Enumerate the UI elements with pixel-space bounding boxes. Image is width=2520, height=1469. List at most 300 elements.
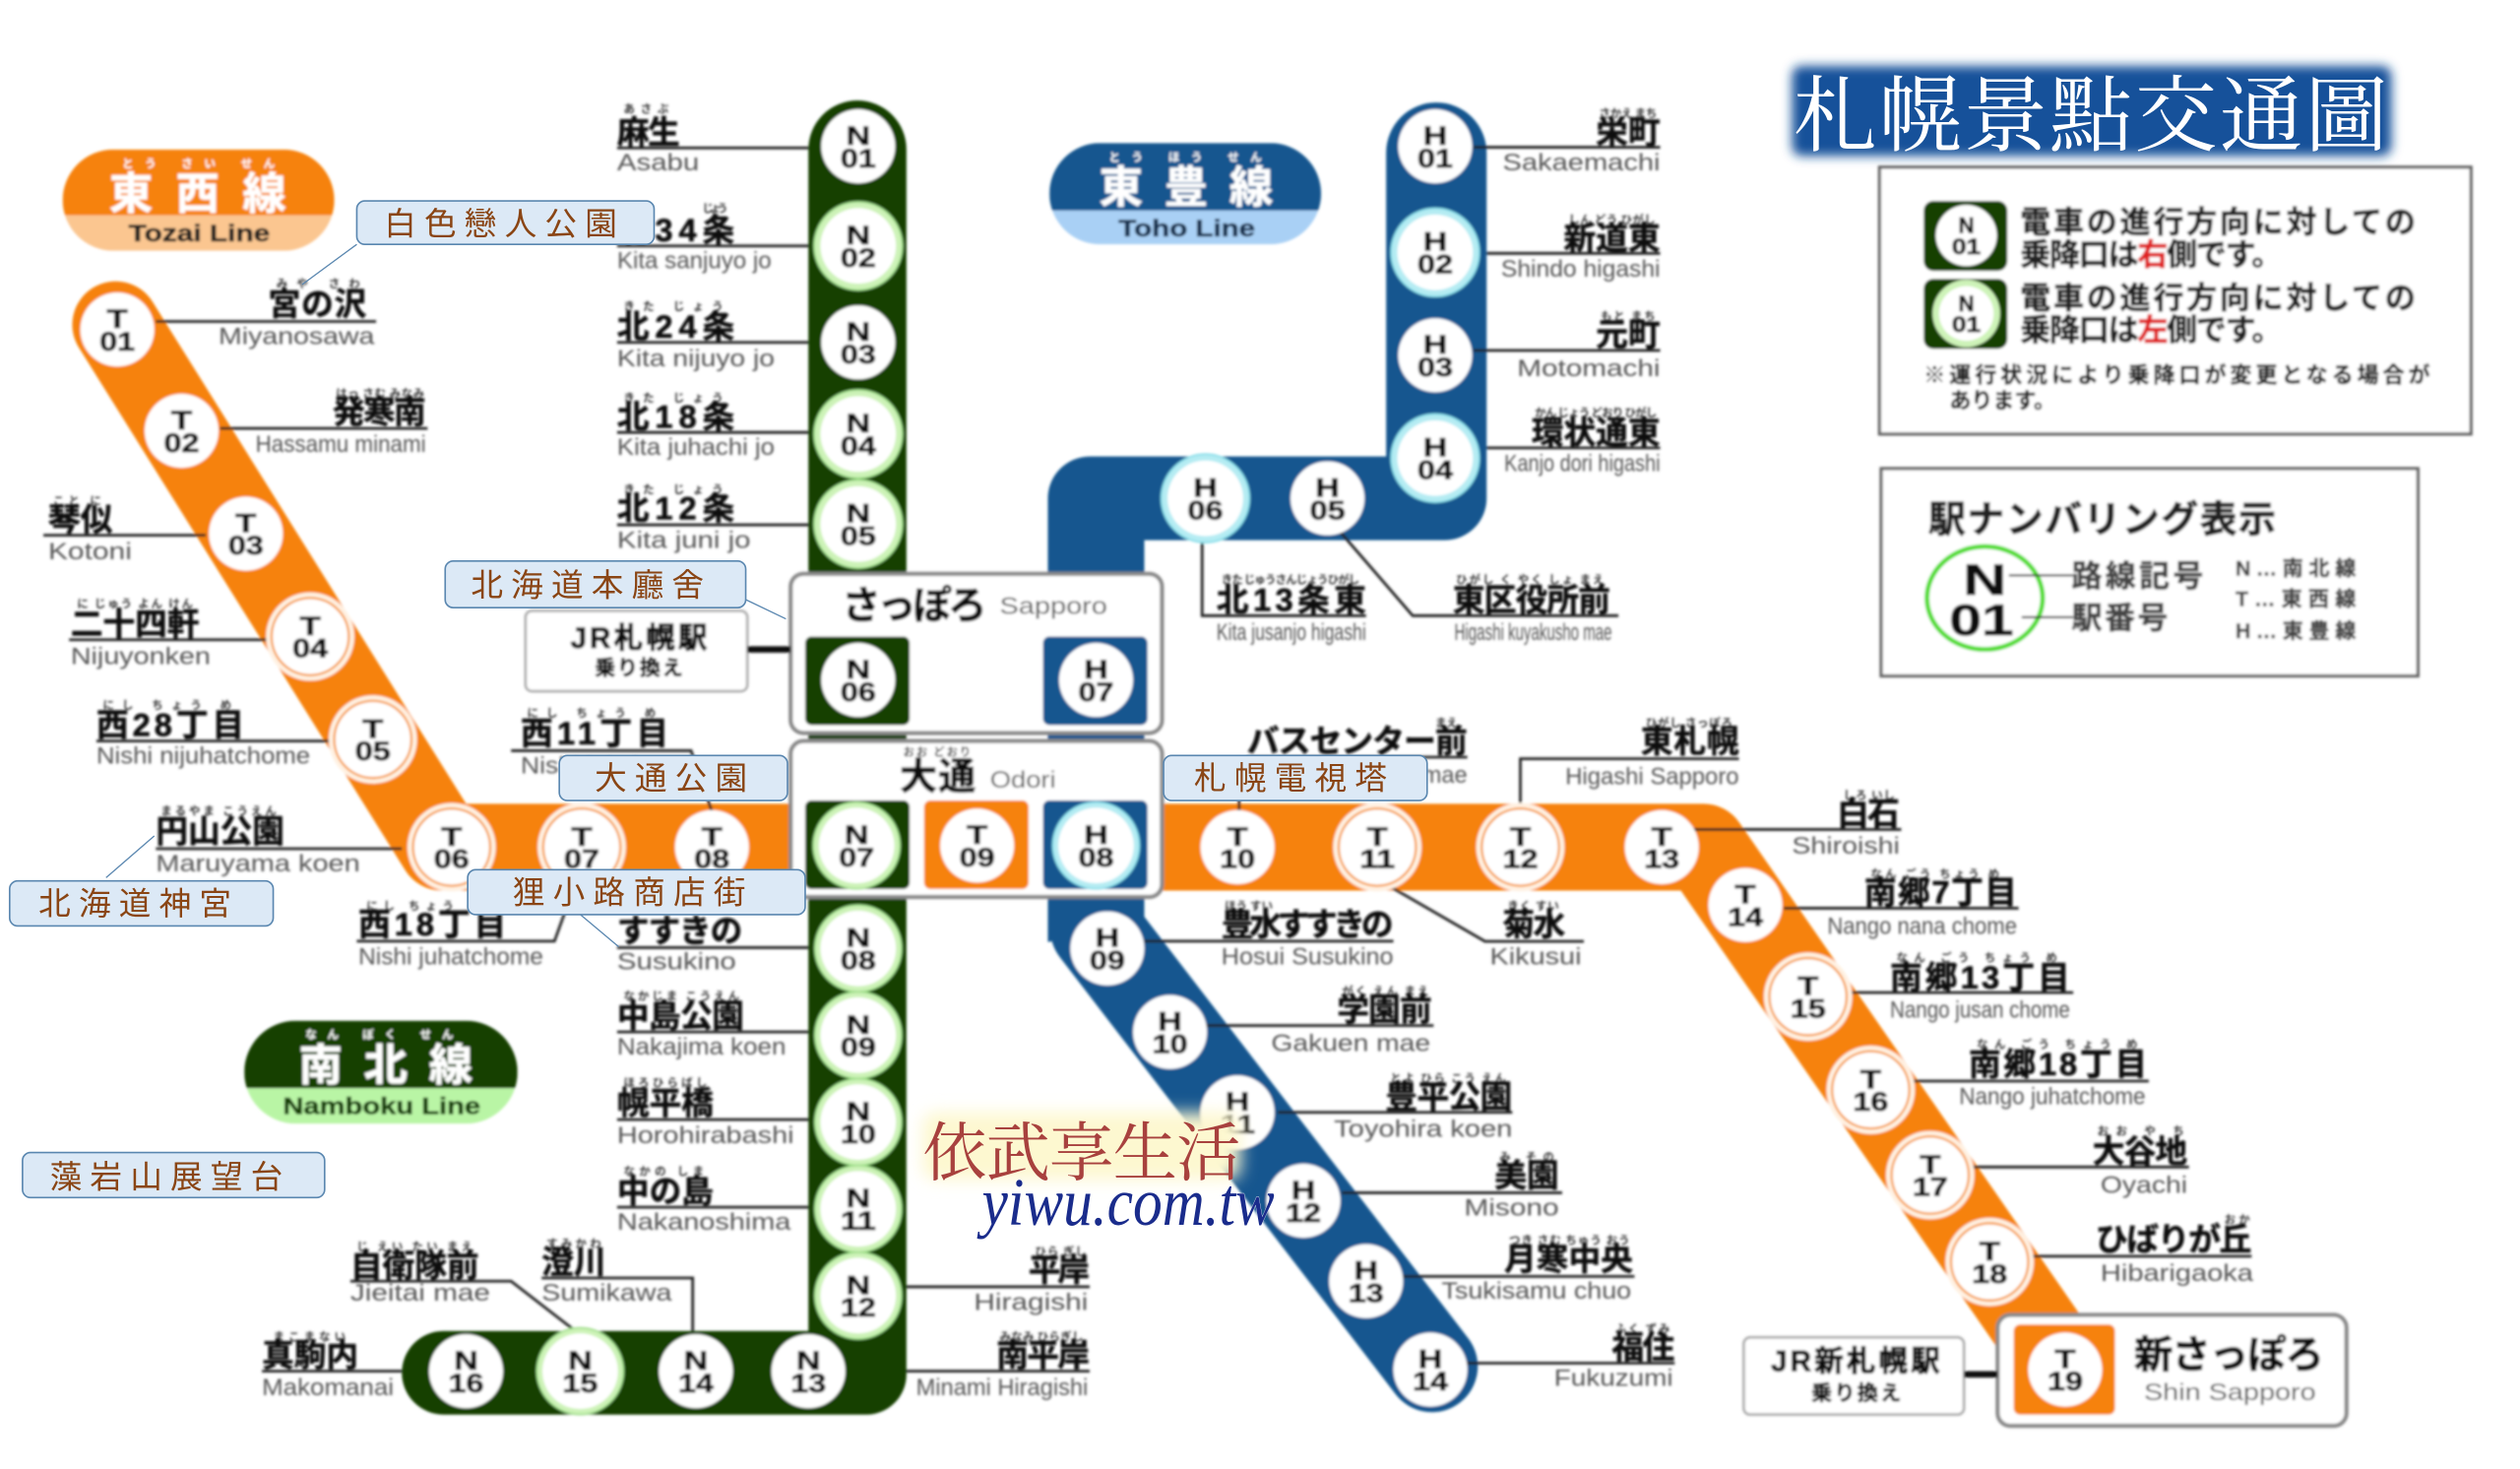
station T03: 03 (228, 531, 264, 560)
station N05: N (847, 499, 870, 529)
label: Hassamu minami: Hassamu minami (256, 431, 426, 458)
station N05: 05 (841, 521, 876, 550)
label: Makomanai: 真駒内 (262, 1337, 358, 1373)
station T08 (675, 810, 749, 884)
station N08: 08 (841, 945, 876, 975)
station N02: 02 (841, 243, 876, 273)
callout: Mt Moiwa Observatory: 藻岩山展望台 (50, 1152, 290, 1198)
label: Misono: み その (1499, 1149, 1554, 1165)
station T12 (1477, 803, 1564, 891)
label: Nakajima koen: Nakajima koen (617, 1034, 786, 1060)
station T16: 16 (1853, 1087, 1888, 1117)
station H03: H (1423, 330, 1447, 359)
label: Kotoni: Kotoni (48, 539, 132, 565)
station T18: T (1980, 1237, 2001, 1266)
station N12: N (847, 1270, 870, 1300)
pill: Tozai Line (63, 150, 335, 251)
station T02 (145, 394, 219, 468)
label: Nango 7: Nango nana chome (1827, 914, 2017, 940)
label: Kita 12: Kita juni jo (617, 528, 750, 554)
station N06: N (847, 655, 870, 684)
callout: Hokkaido Shrine: 北海道神宮 (38, 878, 239, 925)
pill: Namboku Line: 南北線 (299, 1042, 472, 1090)
station N08: N (847, 924, 870, 953)
station N16: N (454, 1346, 478, 1375)
legend: station numbering: 路線記号 (2071, 559, 2203, 594)
legend: boarding side: ※運行状況により乗降口が変更となる場合が (1923, 363, 2430, 388)
label: Kita 18: きた じょう (623, 390, 724, 406)
station H06: 06 (1188, 495, 1223, 525)
label: Bus center mae (1239, 715, 1468, 811)
label: Oyachi: 大谷地 (2093, 1132, 2187, 1169)
label: Nijuyonken (69, 596, 270, 670)
station T10: T (1228, 822, 1248, 852)
station H07: H (1084, 655, 1108, 684)
station T09: 09 (960, 843, 995, 872)
pill: Namboku Line: Namboku Line (283, 1093, 480, 1119)
station N07: N (845, 820, 868, 850)
label: Miyanosawa: みや さわ (277, 276, 360, 291)
station H04: 04 (1418, 456, 1453, 485)
label: Maruyama koen (156, 803, 402, 877)
callout: Shiroi Koibito Park: 白色戀人公園 (384, 198, 625, 244)
label: Nishi 11: 西11丁目 (521, 715, 668, 751)
label: Sakaemachi: 栄町 (1596, 113, 1661, 150)
label: Hassamu minami: 発寒南 (333, 393, 426, 429)
station N09 (815, 991, 902, 1079)
station T08: T (702, 822, 724, 852)
station N10: 10 (841, 1119, 876, 1149)
legend: boarding side: あります。 (1949, 389, 2055, 414)
station N02: N (847, 221, 870, 250)
label: Hiragishi: Hiragishi (974, 1290, 1088, 1316)
label: Nishi 28: にし ちょう め (102, 697, 231, 713)
label: Makomanai: まこまない (274, 1329, 346, 1345)
station T03: T (235, 508, 257, 538)
pill: Toho Line: 東豊線 (1100, 164, 1273, 213)
station T15: 15 (1791, 993, 1826, 1023)
label: Fukuzumi: Fukuzumi (1554, 1365, 1673, 1391)
label: Shiroishi: しろ いし (1844, 787, 1895, 802)
station H08 (1052, 802, 1140, 889)
station H01 (1398, 109, 1473, 183)
pill: Toho Line (1049, 143, 1321, 244)
station T19: 19 (2048, 1367, 2083, 1396)
station T18: 18 (1972, 1259, 2007, 1289)
label: Nakanoshima: なかの しま (623, 1163, 704, 1179)
label: Shiroishi: 白石 (1837, 796, 1900, 832)
pill: Namboku Line: なん ぼく せん (305, 1027, 453, 1043)
station N01: 01 (841, 144, 876, 173)
station H13: H (1354, 1256, 1378, 1286)
label: Higashi Sapporo: ひがし さっぽろ (1646, 715, 1732, 731)
callout: Odori Park: 大通公園 (595, 753, 755, 799)
label: Oyachi (1967, 1123, 2189, 1198)
label: Tsukisamu chuo: 月寒中央 (1504, 1241, 1633, 1277)
station H06: H (1193, 473, 1218, 502)
label: Nango 13: Nango jusan chome (1890, 996, 2070, 1023)
label: Nakajima koen (617, 989, 808, 1060)
station T17: 17 (1913, 1173, 1948, 1202)
label: Kita 12 (617, 481, 808, 554)
station N14: N (684, 1346, 708, 1375)
label: Bus center mae: Bus mae (1376, 762, 1468, 789)
label: Miyanosawa: Miyanosawa (219, 323, 375, 350)
station T09 (940, 808, 1014, 882)
station N11: N (847, 1183, 870, 1213)
label: Fukuzumi: 福住 (1612, 1329, 1674, 1366)
label: Kita 18: 北18条 (617, 398, 734, 434)
label: Hassamu minami: はっ さむ みなみ (336, 385, 424, 401)
label: Higashi kuyakusho mae: 東区役所前 (1453, 581, 1610, 617)
station H06 (1162, 454, 1249, 543)
label: Nishi 18: 西18丁目 (358, 906, 506, 942)
label: Kita 13 higashi: 北13条東 (1217, 581, 1366, 617)
label: Kita 34: Kita sanjuyo jo (617, 248, 772, 275)
watermark: yiwu.com.tw (976, 1165, 1275, 1240)
station N12 (815, 1252, 902, 1339)
box: Shin Sapporo station (1997, 1315, 2347, 1426)
label: Nango 7 (1784, 865, 2019, 940)
station N13 (772, 1334, 846, 1408)
label: Motomachi: もと まち (1601, 308, 1656, 324)
station H09: 09 (1090, 945, 1125, 975)
station H10: H (1158, 1007, 1182, 1037)
label: Susukino (617, 913, 808, 975)
label: Hibarigaoka: Hibarigaoka (2101, 1260, 2253, 1287)
station H10: 10 (1153, 1029, 1188, 1058)
label: Motomachi: Motomachi (1517, 355, 1661, 382)
label: Oyachi: おお や ち (2098, 1123, 2184, 1139)
station N08 (815, 905, 902, 991)
station T12: 12 (1503, 845, 1538, 874)
label: Nakanoshima: Nakanoshima (617, 1209, 791, 1236)
label: Tsukisamu chuo: つき さむ ちゅう おう (1509, 1233, 1630, 1248)
icon: N01 left side: 01 (1952, 312, 1981, 337)
station N03: 03 (841, 340, 876, 369)
station T06: 06 (434, 845, 470, 874)
station N15 (536, 1328, 623, 1415)
box: Sapporo station: さっぽろ (843, 586, 986, 628)
station H11: 11 (1220, 1110, 1255, 1139)
label: Kita 34: 北34条 (617, 212, 734, 248)
watermark: 依武享生活 (922, 1118, 1240, 1189)
station H04 (1391, 414, 1480, 502)
station N12: 12 (841, 1293, 876, 1322)
station N03 (821, 305, 895, 379)
label: Asabu: 麻生 (617, 113, 680, 150)
station H04: H (1423, 433, 1447, 463)
box: JR Sapporo transfer: JR札幌駅 (571, 622, 707, 655)
station T07 (537, 803, 626, 891)
station N07 (813, 802, 900, 889)
station H09 (1070, 912, 1144, 986)
station H10 (1133, 995, 1207, 1069)
label: Sumikawa: すみかわ (546, 1236, 601, 1251)
label: Nishi 28 (96, 697, 330, 770)
label: Nishi 18 (356, 892, 572, 971)
legend: station numbering: 01 (1949, 597, 2014, 645)
station H09: H (1096, 924, 1119, 953)
station N11: 11 (841, 1206, 876, 1236)
label: Nakajima koen: 中島公園 (617, 997, 744, 1034)
station N11 (815, 1166, 902, 1252)
station N14: 14 (678, 1369, 714, 1398)
label: Minami Hiragishi: みなみ ひらぎし (1000, 1329, 1083, 1345)
icon: N01 left side (1923, 279, 2007, 349)
label: Fukuzumi (1466, 1320, 1674, 1391)
station T06: T (441, 822, 463, 852)
label: Minami Hiragishi (907, 1329, 1090, 1401)
label: Minami Hiragishi: Minami Hiragishi (916, 1374, 1088, 1401)
label: Gakuen mae: がく えん まえ (1342, 984, 1428, 999)
label: Hosui Susukino: ほう すい (1225, 898, 1273, 914)
label: Kikusui: きく すい (1507, 898, 1559, 914)
box: Odori station: 大通 (900, 756, 976, 798)
label: Maruyama koen: まるやま こうえん (160, 803, 277, 819)
label: Hiragishi: 平岸 (1029, 1251, 1090, 1288)
station T01 (81, 292, 155, 366)
station H08: H (1084, 820, 1108, 850)
label: Kita 34 (617, 201, 808, 275)
station H05: H (1315, 473, 1340, 502)
station T04: T (299, 611, 321, 641)
label: Higashi Sapporo: 東札幌 (1641, 723, 1739, 759)
legend: station numbering: N…南北線 (2236, 556, 2356, 580)
station N16 (429, 1334, 503, 1408)
label: Hibarigaoka: おか (2225, 1211, 2250, 1227)
label: Kita 24 (617, 298, 808, 372)
pill: Namboku Line (244, 1021, 518, 1123)
label: Jieitai mae: 自衛隊前 (350, 1246, 479, 1283)
station T01: 01 (99, 327, 135, 356)
station T04 (266, 593, 354, 680)
station T16 (1827, 1046, 1915, 1134)
pill: Tozai Line: 東西線 (109, 170, 286, 219)
station N15: 15 (562, 1369, 598, 1398)
label: Toyohira koen: 豊平公園 (1385, 1078, 1512, 1115)
label: Kotoni: こと に (53, 493, 101, 509)
label: Hosui Susukino (1144, 898, 1394, 971)
label: Nishi 11 (511, 705, 712, 811)
station H12: H (1292, 1176, 1315, 1205)
label: Shiroishi (1687, 787, 1901, 860)
box: Odori station: おお どおり (904, 743, 971, 759)
station N04 (814, 390, 903, 479)
station N13: 13 (790, 1369, 826, 1398)
callout: Hokkaido Government Office: 北海道本廳舍 (471, 560, 712, 607)
label: Higashi Sapporo: Higashi Sapporo (1565, 764, 1739, 791)
station T12: T (1510, 822, 1532, 852)
label: Kikusui (1389, 886, 1584, 971)
station T13 (1625, 810, 1699, 884)
station N07: 07 (839, 843, 874, 872)
station H14 (1394, 1332, 1468, 1407)
label: Hosui Susukino: 豊水すすきの (1222, 906, 1394, 942)
label: Toyohira koen (1278, 1070, 1512, 1142)
station T16: T (1860, 1064, 1882, 1094)
line: Toho (blue) (1047, 102, 1486, 1367)
label: Nango 7: 南郷7丁目 (1864, 874, 2017, 911)
station T11: 11 (1359, 845, 1395, 874)
label: Hibarigaoka (2028, 1211, 2253, 1287)
legend: station numbering: 駅ナンバリング表示 (1928, 498, 2276, 540)
label: Sumikawa (541, 1236, 693, 1331)
label: Toyohira koen: Toyohira koen (1334, 1116, 1512, 1142)
station N04: N (847, 409, 870, 438)
station T14: 14 (1728, 902, 1763, 931)
callout: Hokkaido Shrine (10, 836, 274, 926)
label: Toyohira koen: とよ ひら こう えん (1390, 1070, 1506, 1086)
label: Kita 24: きた じょう (623, 298, 724, 314)
label: Shindo higashi: 新道東 (1564, 220, 1661, 256)
station T03 (209, 496, 283, 571)
label: Gakuen mae (1205, 984, 1433, 1057)
label: Miyanosawa: 宮の沢 (269, 286, 367, 322)
label: Nishi 18: にし ちょう め (366, 898, 479, 914)
callout: Tanukikoji Shopping Street: 狸小路商店街 (513, 867, 754, 914)
callout: Odori Park (559, 753, 788, 800)
label: Kikusui: 菊水 (1503, 906, 1565, 942)
label: Jieitai mae: じ えい たい まえ (356, 1239, 472, 1254)
station N01 (821, 109, 895, 183)
label: Maruyama koen: Maruyama koen (156, 851, 360, 877)
station T15 (1764, 952, 1853, 1041)
legend: station numbering: T…東西線 (2236, 588, 2356, 611)
icon: N01 right side (1923, 201, 2007, 271)
station N09: 09 (841, 1033, 876, 1062)
label: Maruyama koen: 円山公園 (156, 813, 284, 850)
station T02: 02 (164, 428, 199, 458)
legend: station numbering: H…東豊線 (2236, 619, 2356, 643)
label: Higashi Sapporo (1520, 715, 1739, 811)
legend: boarding side: 電車の進行方向に対しての (2020, 281, 2416, 315)
box: Odori station: Odori (990, 767, 1056, 794)
pill: Toho Line: とう ほう せん (1109, 149, 1262, 164)
station T13: T (1652, 822, 1672, 852)
station H11 (1201, 1075, 1275, 1149)
label: Kanjo dori higashi (1486, 405, 1661, 477)
label: Nakanoshima (617, 1163, 808, 1236)
label: Hassamu minami (220, 385, 427, 458)
station N10 (815, 1079, 902, 1166)
label: Nango 18: Nango juhatchome (1959, 1084, 2146, 1111)
station H03: 03 (1418, 352, 1453, 382)
station H02 (1391, 208, 1480, 296)
pill: Tozai Line: とう さい せん (122, 156, 275, 171)
station H08: 08 (1079, 843, 1113, 872)
label: Makomanai: Makomanai (262, 1374, 394, 1401)
label: Asabu: あさぶ (623, 100, 669, 116)
label: Higashi kuyakusho mae: ひがし く やく しょ まえ (1456, 572, 1604, 588)
callout: Sapporo TV Tower: 札幌電視塔 (1194, 753, 1395, 799)
label: Misono (1342, 1149, 1562, 1221)
label: Nango 18: なん ごう ちょう め (1977, 1036, 2137, 1052)
label: Kotoni: 琴似 (48, 501, 113, 538)
label: Shindo higashi: しん どう ひがし (1568, 212, 1656, 227)
label: Nishi 28: 西28丁目 (96, 707, 244, 743)
label: Sumikawa: 澄川 (541, 1244, 606, 1280)
station H13: 13 (1349, 1278, 1384, 1308)
label: Nango 13 (1852, 949, 2073, 1023)
label: Kita 24: 北24条 (617, 308, 734, 345)
label: Minami Hiragishi: 南平岸 (996, 1337, 1090, 1373)
station T15: T (1797, 972, 1819, 1001)
label: Sumikawa: Sumikawa (541, 1280, 672, 1307)
callout: Hokkaido Government Office (445, 560, 786, 619)
station N03: N (847, 317, 870, 347)
label: Kita 12: きた じょう (623, 481, 724, 497)
label: Jieitai mae: Jieitai mae (350, 1280, 490, 1307)
label: Nijuyonken: 二十四軒 (71, 606, 199, 642)
title: 札幌景點交通圖 (1794, 71, 2388, 163)
station N02 (814, 202, 903, 290)
icon: N01 right side: 01 (1952, 234, 1981, 259)
callout: Shiroi Koibito Park (302, 198, 654, 285)
box: JR Sapporo transfer: 乗り換え (595, 657, 683, 680)
station H02: 02 (1418, 250, 1453, 280)
station H02: H (1423, 227, 1447, 257)
label: Kotoni (43, 493, 206, 565)
station H11: H (1226, 1087, 1249, 1117)
label: Sakaemachi (1474, 105, 1661, 176)
label: Nakanoshima: 中の島 (617, 1173, 714, 1209)
station T13: 13 (1644, 845, 1679, 874)
label: Nango 13: 南郷13丁目 (1890, 959, 2070, 995)
label: Nijuyonken: に じゅう よん けん (77, 596, 193, 611)
station T07: T (571, 822, 593, 852)
label: Motomachi (1474, 308, 1661, 382)
label: Kanjo dori higashi: 環状通東 (1532, 415, 1661, 451)
label: Horohirabashi (617, 1075, 808, 1149)
station H12 (1267, 1164, 1341, 1238)
label: Jieitai mae (350, 1239, 575, 1331)
station H07 (1059, 643, 1133, 717)
callout: Tanukikoji Shopping Street (468, 867, 805, 947)
label: Susukino: Susukino (617, 948, 736, 975)
label: Shindo higashi (1486, 212, 1661, 283)
label: Nakajima koen: なかじま こうえん (623, 989, 739, 1004)
station T05: T (362, 714, 384, 743)
pill: Tozai Line: Tozai Line (129, 221, 270, 247)
label: Sakaemachi: Sakaemachi (1503, 150, 1661, 176)
icon: N01 left side: N (1959, 291, 1975, 316)
station T06 (408, 803, 496, 891)
station N13: N (796, 1346, 820, 1375)
label: Hosui Susukino: Hosui Susukino (1222, 944, 1394, 971)
label: Misono: Misono (1464, 1194, 1559, 1221)
station H03 (1398, 318, 1473, 392)
label: Nango 18: 南郷18丁目 (1969, 1046, 2147, 1082)
label: Higashi kuyakusho mae: Higashi kuyakusho mae (1455, 619, 1612, 646)
box: Shin Sapporo station: Shin Sapporo (2144, 1379, 2316, 1406)
label: Tsukisamu chuo: Tsukisamu chuo (1441, 1278, 1631, 1305)
label: Kita 13 higashi (1202, 541, 1366, 646)
label: Hiragishi: ひら ぎし (1035, 1244, 1087, 1259)
station N16: 16 (449, 1369, 483, 1398)
legend: station numbering: 駅番号 (2071, 601, 2168, 635)
label: Kanjo dori higashi: かん じょう どおり ひがし (1535, 405, 1657, 420)
label: Misono: 美園 (1494, 1157, 1559, 1193)
label: Nishi 28: Nishi nijuhatchome (96, 743, 310, 770)
icon: N01 right side: N (1959, 214, 1975, 238)
station N09: N (847, 1010, 870, 1040)
station N06 (821, 643, 895, 717)
label: Gakuen mae: Gakuen mae (1271, 1031, 1430, 1057)
label: Shiroishi: Shiroishi (1792, 833, 1900, 860)
label: Shindo higashi: Shindo higashi (1501, 256, 1661, 283)
legend: boarding side (1879, 167, 2471, 434)
